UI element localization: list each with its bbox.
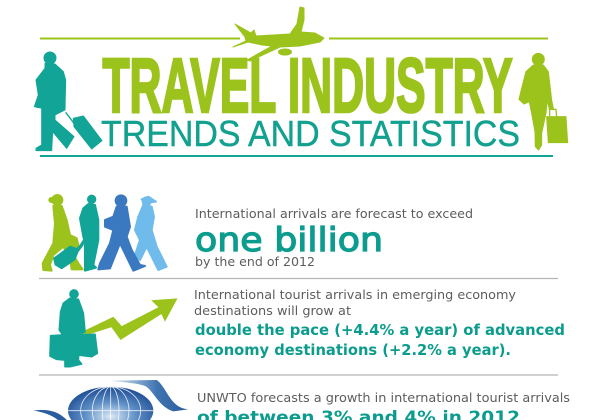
traveller: green woman xyxy=(43,195,83,271)
header rule: teal xyxy=(40,155,553,157)
arrow: growth xyxy=(83,299,177,339)
text: UNWTO forecast: UNWTO forecasts a growth in international tourist arrivals xyxy=(197,390,570,405)
traveller: teal man xyxy=(80,196,98,271)
highlight: double the pace: economy destinations (+2.2% a year). xyxy=(195,341,511,359)
subtitle: TRENDS AND STATISTICS xyxy=(101,113,520,154)
highlight: double the pace xyxy=(195,321,565,359)
traveller: suitcase xyxy=(53,237,85,269)
big figure: one billion: one billion xyxy=(195,220,383,259)
icon: UNWTO globe xyxy=(33,380,188,420)
icon: airplane xyxy=(233,7,324,61)
highlight: double the pace: double the pace (+4.4% a year) of advanced xyxy=(195,321,565,339)
text: by the end of 2012: by the end of 2012 xyxy=(195,254,315,269)
man and suitcases xyxy=(50,290,97,367)
icon: businessman with suitcase xyxy=(34,52,102,151)
text: emerging economy: destinations will grow at xyxy=(194,303,351,318)
traveller: blue woman xyxy=(98,195,145,271)
traveller: light blue man xyxy=(135,197,167,270)
icon: man with suitcases and rising arrow xyxy=(50,290,177,367)
divider xyxy=(39,278,558,375)
text: international arrivals: International arrivals are forecast to exceed xyxy=(195,206,473,221)
header rule: green xyxy=(40,38,548,40)
text: emerging economy: International tourist arrivals in emerging economy xyxy=(194,287,516,302)
icon: woman with suitcase xyxy=(519,53,568,150)
icon: four walking travellers xyxy=(43,195,167,271)
text: emerging economy xyxy=(194,287,516,318)
